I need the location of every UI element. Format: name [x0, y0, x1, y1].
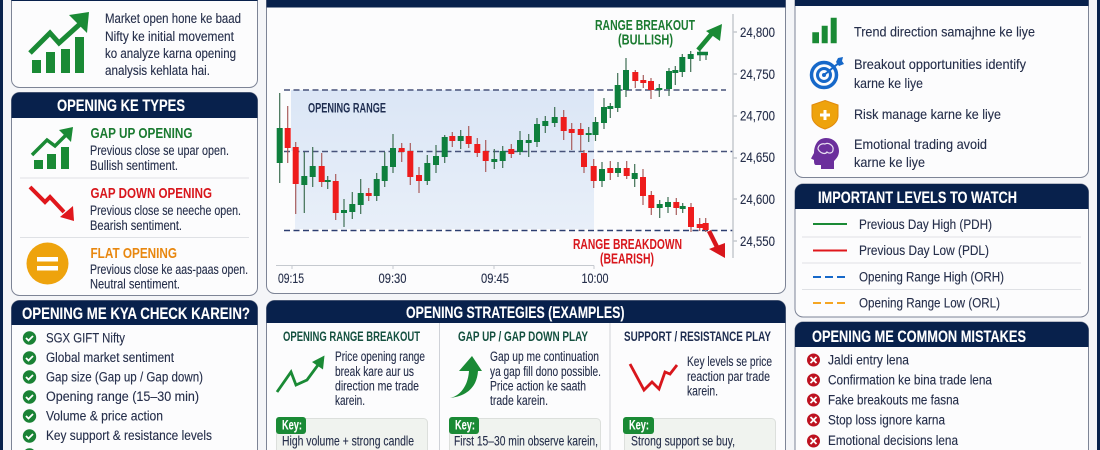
candlesticks — [280, 48, 708, 232]
gap up opening text: Bullish sentiment. — [90, 158, 178, 173]
panel: opening me kya check karein — [12, 300, 258, 450]
mistakes text — [828, 352, 992, 448]
label: opening range: OPENING RANGE — [308, 100, 386, 116]
checklist text: Volume & price action — [46, 408, 163, 424]
strategy: opening range breakout: High volume + strong candle — [282, 434, 414, 448]
heading: opening strategies: OPENING STRATEGIES (EXAMPLES) — [406, 303, 624, 322]
icon: zigzag — [630, 364, 677, 390]
price axis: 24,600 — [740, 192, 775, 207]
strategy: opening range breakout: Price opening range — [335, 349, 425, 364]
emotional text — [854, 136, 987, 170]
gap up opening text: Previous close se upar open. — [90, 143, 229, 158]
price axis: 24,750 — [740, 67, 775, 82]
breakout text: karne ke liye — [854, 75, 923, 91]
panel: why opening analysis: Risk manage karne ke liye — [854, 106, 1001, 122]
strategy: support resistance play — [623, 329, 776, 450]
icon: flat equals — [26, 242, 68, 284]
strategy: gap up gap down play: Price action ke saath — [490, 378, 586, 394]
intro text: Market open hone ke baad — [105, 11, 241, 26]
checklist text: Gap size (Gap up / Gap down) — [46, 370, 203, 384]
price axis: 24,700 — [740, 108, 775, 124]
panel: why opening analysis: Trend direction samajhne ke liye — [854, 24, 1035, 40]
heading: important levels: IMPORTANT LEVELS TO WATCH — [818, 188, 1017, 207]
time axis — [276, 266, 608, 286]
label: range breakdown bearish: RANGE BREAKDOWN — [573, 236, 682, 253]
mistakes text: Stop loss ignore karna — [828, 412, 945, 428]
strategy: opening range breakout: Key: — [282, 418, 302, 432]
breakout text — [854, 56, 1026, 91]
flat opening text — [90, 245, 248, 292]
intro text: ko analyze karna opening — [105, 46, 236, 61]
panel: why opening analysis — [795, 0, 1088, 178]
legend labels: Opening Range Low (ORL) — [859, 296, 1000, 310]
panel: important levels to watch — [795, 184, 1088, 317]
strategy: support resistance play: SUPPORT / RESISTANCE PLAY — [624, 329, 771, 344]
strategy: gap up gap down play: First 15–30 min observe karein, — [454, 434, 598, 448]
legend labels: Previous Day Low (PDL) — [859, 243, 989, 258]
panel: candlestick chart — [266, 0, 786, 294]
intro text: analysis kehlata hai. — [105, 63, 210, 78]
gap up opening text — [90, 125, 229, 173]
label: range breakdown bearish: (BEARISH) — [600, 250, 654, 268]
strategy: opening range breakout: direction me trade — [335, 378, 419, 394]
gap down opening text — [90, 185, 241, 233]
arrow: bullish breakout — [698, 24, 722, 50]
heading: check list: OPENING ME KYA CHECK KAREIN? — [22, 304, 250, 323]
strategy: gap up gap down play: Gap up me continuation — [490, 349, 599, 364]
intro text: Nifty ke initial movement — [105, 29, 234, 44]
checklist text: Global market sentiment — [46, 350, 174, 365]
checklist text — [46, 330, 212, 443]
label: range breakout bullish — [595, 17, 695, 48]
legend lines — [813, 224, 847, 303]
intro text — [105, 11, 241, 78]
legend labels — [859, 217, 1004, 310]
price axis: 24,650 — [740, 150, 775, 165]
price axis: 24,550 — [740, 234, 775, 249]
strategy: gap up gap down play: Key: — [455, 418, 475, 432]
icon: rising bars with arrow — [30, 12, 89, 73]
gap down opening text: Bearish sentiment. — [90, 218, 182, 233]
strategy: opening range breakout: OPENING RANGE BREAKOUT — [283, 329, 421, 344]
gap down opening text: Previous close se neeche open. — [90, 203, 241, 218]
strategy: gap up gap down play — [449, 329, 601, 450]
price axis: 24,800 — [740, 25, 775, 40]
icon: target — [812, 57, 844, 88]
strategy: support resistance play: Key: — [629, 418, 649, 432]
panel: opening ke types — [12, 92, 258, 296]
icon: curved arrow — [450, 356, 482, 398]
icon: brain head — [811, 138, 839, 169]
emotional text: Emotional trading avoid — [854, 136, 987, 152]
gap up opening text: GAP UP OPENING — [90, 125, 192, 142]
mistakes text: Jaldi entry lena — [828, 352, 909, 368]
panel: opening strategies — [266, 300, 786, 450]
time axis: 09:30 — [378, 271, 406, 286]
emotional text: karne ke liye — [854, 154, 925, 170]
gap down opening text: GAP DOWN OPENING — [90, 185, 212, 202]
strategy: gap up gap down play: ya gap fill dono possible. — [490, 364, 601, 379]
breakout text: Breakout opportunities identify — [854, 56, 1026, 72]
opening range shaded zone — [291, 90, 594, 229]
panel: common mistakes — [795, 322, 1088, 450]
strategy: opening range breakout: break kare aur us — [335, 364, 414, 379]
mistakes text: Confirmation ke bina trade lena — [828, 372, 992, 388]
panel: what is opening analysis — [12, 0, 258, 88]
strategy: gap up gap down play: trade karein. — [490, 393, 548, 408]
icon: breakout arrow — [277, 356, 324, 392]
icon: gap down — [30, 187, 74, 221]
strategy: opening range breakout: karein. — [335, 393, 365, 408]
label: range breakout bullish: (BULLISH) — [618, 32, 673, 48]
strategy: opening range breakout — [276, 329, 428, 450]
price axis — [733, 14, 775, 258]
heading: common mistakes: OPENING ME COMMON MISTAKES — [812, 327, 1026, 346]
mistakes text: Emotional decisions lena — [828, 433, 958, 448]
time axis: 10:00 — [582, 271, 608, 286]
time axis: 09:45 — [481, 271, 509, 286]
strategy: support resistance play: karein. — [687, 384, 718, 398]
strategy: support resistance play: reaction par trade — [687, 369, 770, 384]
label: range breakdown bearish — [573, 236, 682, 268]
icon: shield — [812, 100, 838, 129]
legend labels: Opening Range High (ORH) — [859, 270, 1004, 284]
arrow: bearish breakdown — [709, 231, 725, 258]
strategy: support resistance play: Strong support se buy, — [631, 434, 735, 448]
strategy: support resistance play: Key levels se price — [687, 354, 772, 369]
legend labels: Previous Day High (PDH) — [859, 217, 992, 232]
checklist text: Opening range (15–30 min) — [46, 389, 199, 404]
flat opening text: Neutral sentiment. — [90, 276, 180, 292]
mistakes text: Fake breakouts me fasna — [828, 392, 959, 408]
cross icons — [807, 354, 820, 448]
checklist text: SGX GIFT Nifty — [46, 330, 125, 346]
label: range breakout bullish: RANGE BREAKOUT — [595, 17, 695, 34]
flat opening text: Previous close ke aas-paas open. — [90, 262, 248, 277]
flat opening text: FLAT OPENING — [90, 245, 177, 262]
icon: green bars — [812, 18, 837, 43]
strategy: gap up gap down play: GAP UP / GAP DOWN PLAY — [458, 329, 588, 344]
heading: opening ke types: OPENING KE TYPES — [57, 96, 185, 115]
icon: gap up — [32, 127, 73, 169]
checklist text: Key support & resistance levels — [46, 428, 212, 443]
range dashed lines — [284, 90, 733, 230]
time axis: 09:15 — [278, 271, 304, 286]
check icons — [23, 331, 36, 450]
